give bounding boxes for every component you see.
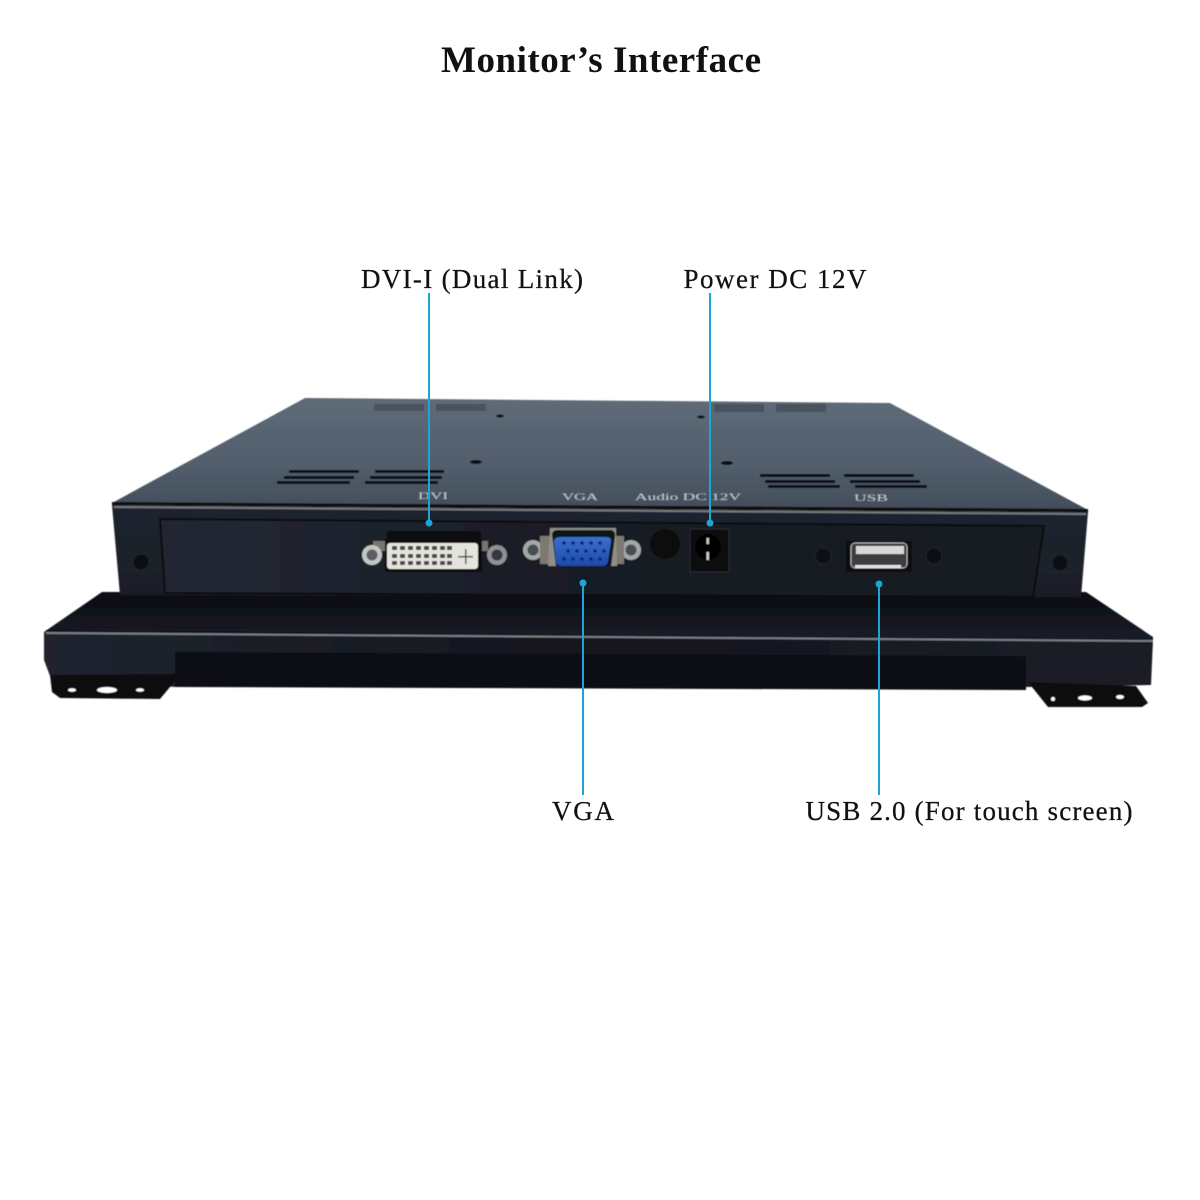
audio jack bbox=[650, 529, 680, 559]
connector plate bbox=[160, 519, 1044, 597]
USB port bbox=[846, 541, 912, 572]
callout: Power DC 12V: Power DC 12V bbox=[684, 264, 867, 294]
callout: USB 2.0 (For touch screen) bbox=[806, 580, 1132, 826]
port silkscreen labels: VGA bbox=[562, 492, 599, 502]
callout: VGA: VGA bbox=[552, 796, 614, 826]
lower frame bbox=[44, 592, 1153, 690]
callout: USB 2.0 (For touch screen): USB 2.0 (For touch screen) bbox=[806, 796, 1132, 826]
upper housing front bbox=[112, 505, 1088, 597]
VGA port bbox=[523, 528, 641, 566]
port silkscreen labels: Audio DC 12V bbox=[635, 492, 742, 502]
vent slots and marks bbox=[277, 404, 927, 488]
upper housing top surface bbox=[112, 398, 1088, 510]
callout: VGA bbox=[552, 580, 614, 826]
port silkscreen labels: USB bbox=[854, 493, 888, 503]
left mounting tab bbox=[50, 674, 175, 699]
callout: DVI-I (Dual Link) bbox=[361, 264, 583, 526]
callout: DVI-I (Dual Link): DVI-I (Dual Link) bbox=[361, 264, 583, 294]
title: Monitor’s Interface bbox=[441, 40, 761, 81]
housing screws bbox=[133, 548, 1068, 571]
DC power jack bbox=[690, 529, 729, 572]
DVI port bbox=[362, 531, 507, 572]
port silkscreen labels bbox=[418, 491, 888, 503]
callout: Power DC 12V bbox=[684, 264, 867, 526]
monitor photo illustration bbox=[44, 398, 1153, 707]
port silkscreen labels: DVI bbox=[418, 491, 448, 501]
right mounting tab bbox=[1028, 682, 1148, 707]
